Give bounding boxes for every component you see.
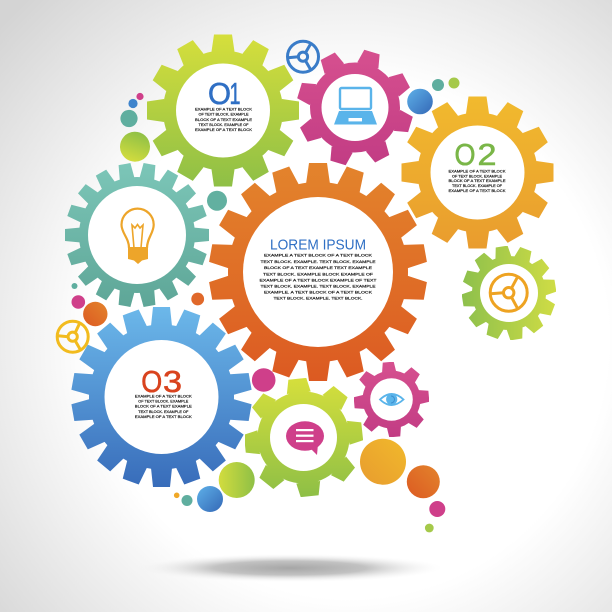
text block 01: OF TEXT BLOCK. EXAMPLE bbox=[198, 113, 249, 117]
icon: yellow wheel bbox=[57, 321, 88, 352]
text block 01: TEXT BLOCK. EXAMPLE OF bbox=[198, 123, 249, 127]
text block 02: BLOCK OF A TEXT EXAMPLE bbox=[448, 179, 506, 183]
text block 03: EXAMPLE OF A TEXT BLOCK bbox=[135, 395, 192, 399]
main text block: EXAMPLE OF A TEXT BLOCK EXAMPLE OF TEXT bbox=[260, 278, 378, 282]
icon: laptop bbox=[334, 88, 377, 124]
main text block: EXAMPLE A TEXT BLOCK OF A TEXT BLOCK bbox=[264, 254, 373, 258]
main text block bbox=[260, 254, 378, 301]
ground shadow bbox=[138, 554, 442, 582]
number 01: 1 bbox=[230, 77, 240, 111]
main text block: TEXT BLOCK. EXAMPLE. TEXT BLOCK. EXAMPLE bbox=[260, 260, 376, 264]
number 02: O bbox=[454, 138, 476, 172]
gear: main orange bbox=[209, 163, 427, 381]
gear: 01 lime bbox=[147, 34, 299, 187]
text block 01: EXAMPLE OF A TEXT BLOCK bbox=[195, 107, 253, 111]
gear: magenta eye bbox=[354, 362, 429, 437]
heading: LOREM IPSUM bbox=[270, 237, 366, 253]
decorative bubbles bbox=[72, 78, 460, 532]
text block 02: EXAMPLE OF A TEXT BLOCK bbox=[448, 169, 506, 173]
main text block: TEXT BLOCK. EXAMPLE BLOCK EXAMPLE OF bbox=[263, 272, 374, 276]
gear: lime chat bbox=[245, 378, 363, 497]
number 03: O bbox=[141, 365, 162, 399]
gear: teal bulb bbox=[65, 163, 209, 307]
number 03 bbox=[141, 365, 182, 399]
icon: orange wheel bbox=[490, 274, 527, 311]
text block 02: TEXT BLOCK. EXAMPLE OF bbox=[452, 184, 503, 188]
main text block: BLOCK OF A TEXT EXAMPLE TEXT EXAMPLE bbox=[264, 266, 373, 270]
icon: chat bubble bbox=[286, 421, 324, 455]
text block 01 bbox=[195, 107, 253, 132]
number 01: O bbox=[208, 77, 231, 111]
text block 01: EXAMPLE OF A TEXT BLOCK bbox=[195, 128, 253, 132]
text block 03 bbox=[135, 395, 192, 419]
main text block: EXAMPLE. A TEXT BLOCK OF A TEXT BLOCK bbox=[264, 291, 373, 295]
text block 01: BLOCK OF A TEXT EXAMPLE bbox=[195, 118, 253, 122]
icon: blue wheel bbox=[288, 41, 318, 72]
text block 03: OF TEXT BLOCK. EXAMPLE bbox=[138, 400, 189, 404]
text block 03: BLOCK OF A TEXT EXAMPLE bbox=[135, 405, 192, 409]
gear: small green wheel bbox=[462, 246, 556, 340]
text block 03: EXAMPLE OF A TEXT BLOCK bbox=[135, 415, 192, 419]
number 02: 2 bbox=[478, 138, 496, 172]
gear: 03 blue bbox=[71, 307, 252, 487]
text block 02: EXAMPLE OF A TEXT BLOCK bbox=[448, 189, 506, 193]
gear: magenta laptop bbox=[297, 49, 413, 166]
main text block: TEXT BLOCK. EXAMPLE. TEXT BLOCK. bbox=[274, 297, 362, 301]
icon: light bulb bbox=[121, 209, 154, 264]
icon: eye bbox=[380, 394, 404, 405]
text block 02: OF TEXT BLOCK. EXAMPLE bbox=[452, 175, 503, 179]
text block 03: TEXT BLOCK. EXAMPLE OF bbox=[138, 410, 189, 414]
text block 02 bbox=[448, 169, 506, 193]
gear: 02 yellow bbox=[401, 96, 554, 249]
main text block: TEXT BLOCK. EXAMPLE. TEXT BLOCK. EXAMPLE bbox=[260, 284, 376, 288]
number 03: 3 bbox=[163, 365, 182, 399]
number 02 bbox=[454, 138, 496, 172]
